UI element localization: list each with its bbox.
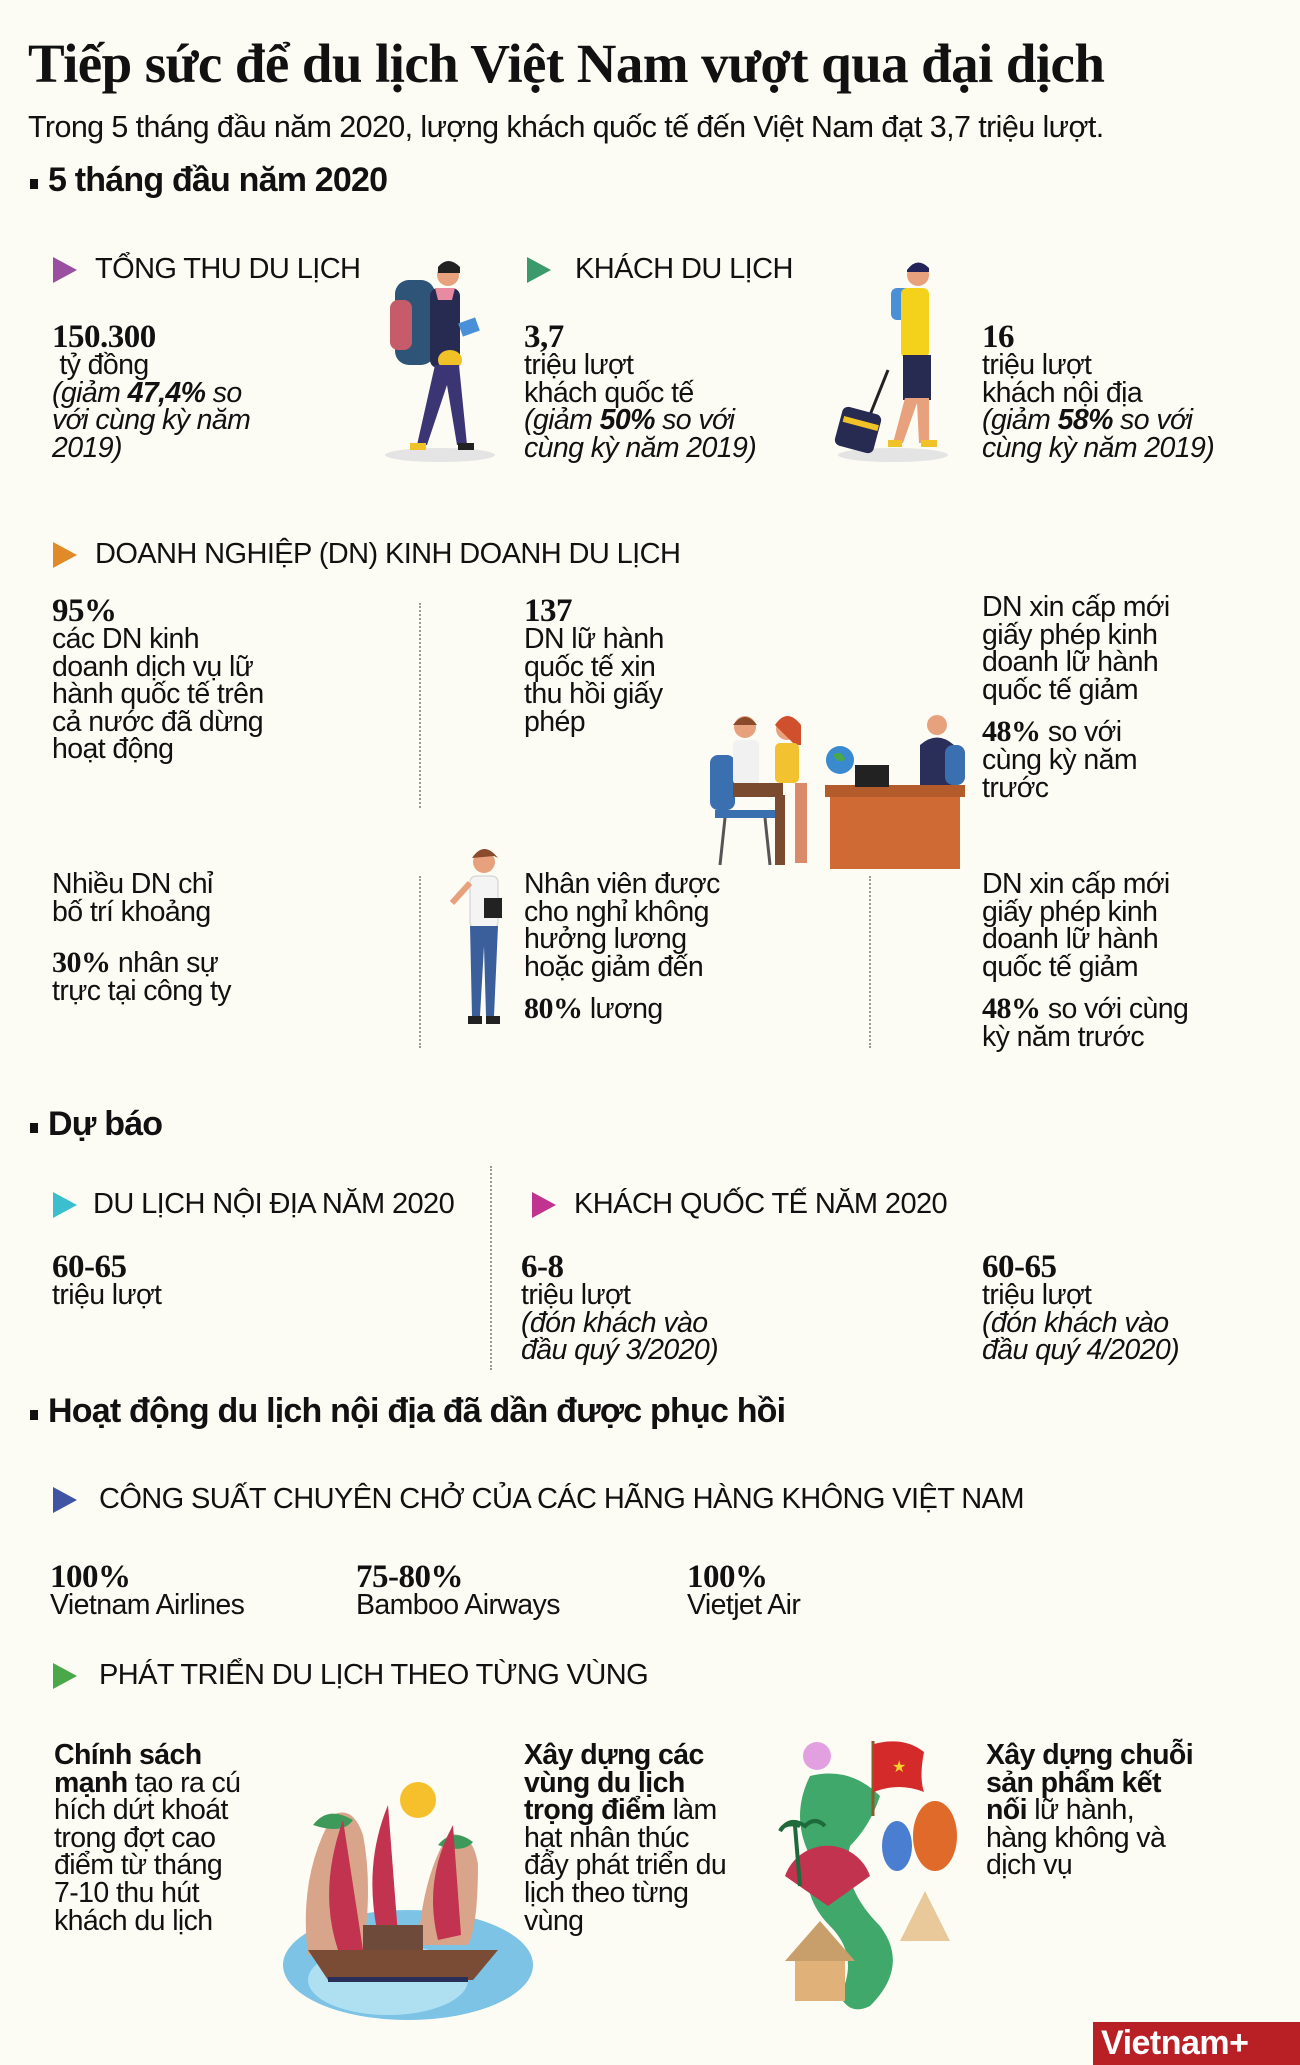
stat: international visitors: cùng kỳ năm 2019) (524, 432, 756, 464)
stat: 137: phép (524, 706, 585, 738)
stat: 137 (524, 593, 664, 738)
stat: international visitors: khách quốc tế (524, 377, 694, 409)
stat: international visitors: 3,7 (524, 319, 564, 355)
stat: 30% staff: bố trí khoảng (52, 896, 211, 928)
stat: 48% license: 48% so với (982, 715, 1122, 748)
stat: international visitors: (giảm 50% so với (524, 404, 734, 436)
logo: Vietnam+: Vietnam+ (1101, 2024, 1249, 2062)
section heading: du bao: Dự báo (48, 1105, 162, 1143)
icon: staff woman (450, 849, 502, 1024)
stat: 137: quốc tế xin (524, 651, 655, 683)
icon: Vietnam map with culture items: ★ (892, 1759, 906, 1776)
header: regional development: PHÁT TRIỂN DU LỊCH THEO TỪNG VÙNG (99, 1659, 648, 1691)
text: key zones: lịch theo từng (524, 1877, 688, 1909)
icon: Vietnam map with culture items (778, 1741, 957, 2010)
stat: 30% staff: 30% nhân sự (52, 946, 218, 979)
header: khach du lich: KHÁCH DU LỊCH (575, 253, 793, 285)
airline: vietjet (687, 1559, 800, 1621)
stat: 80% salary: Nhân viên được (524, 868, 720, 900)
stat: 137: 137 (524, 593, 572, 629)
header: doanh nghiep: DOANH NGHIỆP (DN) KINH DOANH DU LỊCH (95, 538, 680, 570)
airline: bamboo: 75-80% (356, 1559, 463, 1595)
forecast: intl Q3: triệu lượt (521, 1279, 630, 1311)
title: Tiếp sức để du lịch Việt Nam vượt qua đại dịch (28, 33, 1104, 94)
forecast: intl Q3: 6-8 (521, 1249, 564, 1285)
stat: 48% license 2 (982, 868, 1188, 1053)
forecast: domestic (52, 1249, 162, 1311)
forecast: intl Q4: (đón khách vào (982, 1307, 1168, 1339)
forecast: intl Q3 (521, 1249, 718, 1366)
airline: vietjet: Vietjet Air (687, 1589, 800, 1621)
text: key zones: đẩy phát triển du (524, 1849, 726, 1881)
icon: traveller with suitcase (834, 262, 948, 462)
stat: 48% license: quốc tế giảm (982, 674, 1138, 706)
stat: 137: DN lữ hành (524, 623, 664, 655)
stat: 48% license 2: quốc tế giảm (982, 951, 1138, 983)
text: product chain: nối lữ hành, (986, 1794, 1134, 1826)
text: key zones: trọng điểm làm (524, 1794, 717, 1826)
stat: revenue: 2019) (52, 432, 122, 464)
stat: 48% license 2: giấy phép kinh (982, 896, 1157, 928)
text: policy (54, 1739, 240, 1937)
header: airline capacity: CÔNG SUẤT CHUYÊN CHỞ CỦA CÁC HÃNG HÀNG KHÔNG VIỆT NAM (99, 1483, 1024, 1515)
stat: domestic visitors: 16 (982, 319, 1014, 355)
stat: international visitors (524, 319, 756, 464)
text: product chain: dịch vụ (986, 1849, 1072, 1881)
text: key zones: vùng du lịch (524, 1767, 685, 1799)
stat: domestic visitors: khách nội địa (982, 377, 1142, 409)
stat: revenue (52, 319, 250, 464)
stat: 48% license: cùng kỳ năm (982, 744, 1137, 776)
stat: 48% license: giấy phép kinh (982, 619, 1157, 651)
stat: revenue: với cùng kỳ năm (52, 404, 250, 436)
header: noi dia 2020: DU LỊCH NỘI ĐỊA NĂM 2020 (93, 1188, 454, 1220)
icon: office scene (710, 715, 965, 869)
text: policy: hích dứt khoát (54, 1794, 228, 1826)
stat: 80% salary: 80% lương (524, 992, 663, 1025)
airline: vietnam airlines: 100% (50, 1559, 130, 1595)
stat: 48% license: doanh lữ hành (982, 646, 1158, 678)
forecast: intl Q4: 60-65 (982, 1249, 1056, 1285)
stat: 48% license: DN xin cấp mới (982, 591, 1170, 623)
section heading: 5 thang: 5 tháng đầu năm 2020 (48, 161, 387, 199)
icon: Ha Long bay junk boat (283, 1782, 533, 2020)
airline: vietnam airlines (50, 1559, 244, 1621)
stat: 80% salary: hoặc giảm đến (524, 951, 703, 983)
text: policy: Chính sách (54, 1739, 202, 1771)
stat: 48% license (982, 591, 1170, 804)
text: policy: trong đợt cao (54, 1822, 215, 1854)
stat: revenue: 150.300 (52, 319, 156, 355)
header: quoc te 2020: KHÁCH QUỐC TẾ NĂM 2020 (574, 1188, 947, 1220)
forecast: intl Q4: triệu lượt (982, 1279, 1091, 1311)
text: product chain: Xây dựng chuỗi (986, 1739, 1193, 1771)
stat: revenue: tỷ đồng (59, 349, 149, 381)
stat: 95%: doanh dịch vụ lữ (52, 651, 253, 683)
stat: 30% staff: trực tại công ty (52, 975, 231, 1007)
stat: 95%: cả nước đã dừng (52, 706, 263, 738)
stat: domestic visitors (982, 319, 1214, 464)
stat: 48% license 2: doanh lữ hành (982, 923, 1158, 955)
stat: 48% license: trước (982, 772, 1048, 804)
stat: 95%: các DN kinh (52, 623, 199, 655)
text: product chain: sản phẩm kết (986, 1767, 1161, 1799)
forecast: intl Q4 (982, 1249, 1179, 1366)
logo: Vietnam+ (1093, 2022, 1300, 2065)
stat: 80% salary: hưởng lương (524, 923, 686, 955)
forecast: intl Q3: (đón khách vào (521, 1307, 707, 1339)
text: key zones: hạt nhân thúc (524, 1822, 689, 1854)
airline: bamboo: Bamboo Airways (356, 1589, 560, 1621)
airline: vietjet: 100% (687, 1559, 768, 1595)
stat: domestic visitors: triệu lượt (982, 349, 1091, 381)
text: key zones: vùng (524, 1905, 583, 1937)
stat: 30% staff (52, 868, 232, 1007)
text: key zones (524, 1739, 726, 1937)
stat: 95%: hoạt động (52, 733, 173, 765)
stat: 80% salary: cho nghỉ không (524, 896, 709, 928)
forecast: domestic: triệu lượt (52, 1279, 161, 1311)
text: policy: mạnh tạo ra cú (54, 1767, 240, 1799)
text: product chain (986, 1738, 1193, 1881)
text: policy: khách du lịch (54, 1905, 213, 1937)
stat: 48% license 2: DN xin cấp mới (982, 868, 1170, 900)
stat: 48% license 2: 48% so với cùng (982, 992, 1188, 1025)
section heading: phuc hoi: Hoạt động du lịch nội địa đã dần được phục hồi (48, 1392, 785, 1430)
stat: 137: thu hồi giấy (524, 678, 663, 710)
airline: bamboo (356, 1559, 560, 1621)
text: policy: điểm từ tháng (54, 1849, 222, 1881)
icon: backpacker (385, 261, 495, 462)
stat: 48% license 2: kỳ năm trước (982, 1021, 1144, 1053)
stat: 95%: 95% (52, 593, 116, 629)
text: product chain: hàng không và (986, 1822, 1165, 1854)
stat: 30% staff: Nhiều DN chỉ (52, 868, 213, 900)
header: tong thu: TỔNG THU DU LỊCH (95, 253, 360, 285)
stat: domestic visitors: (giảm 58% so với (982, 404, 1192, 436)
subtitle: Trong 5 tháng đầu năm 2020, lượng khách quốc tế đến Việt Nam đạt 3,7 triệu lượt. (28, 110, 1104, 144)
airline: vietnam airlines: Vietnam Airlines (50, 1589, 244, 1621)
forecast: intl Q4: đầu quý 4/2020) (982, 1334, 1179, 1366)
stat: revenue: (giảm 47,4% so (52, 377, 242, 409)
stat: international visitors: triệu lượt (524, 349, 633, 381)
stat: 95% (52, 593, 264, 765)
stat: 95%: hành quốc tế trên (52, 678, 264, 710)
text: policy: 7-10 thu hút (54, 1877, 199, 1909)
text: key zones: Xây dựng các (524, 1739, 704, 1771)
forecast: intl Q3: đầu quý 3/2020) (521, 1334, 718, 1366)
stat: domestic visitors: cùng kỳ năm 2019) (982, 432, 1214, 464)
forecast: domestic: 60-65 (52, 1249, 126, 1285)
stat: 80% salary (524, 868, 720, 1025)
